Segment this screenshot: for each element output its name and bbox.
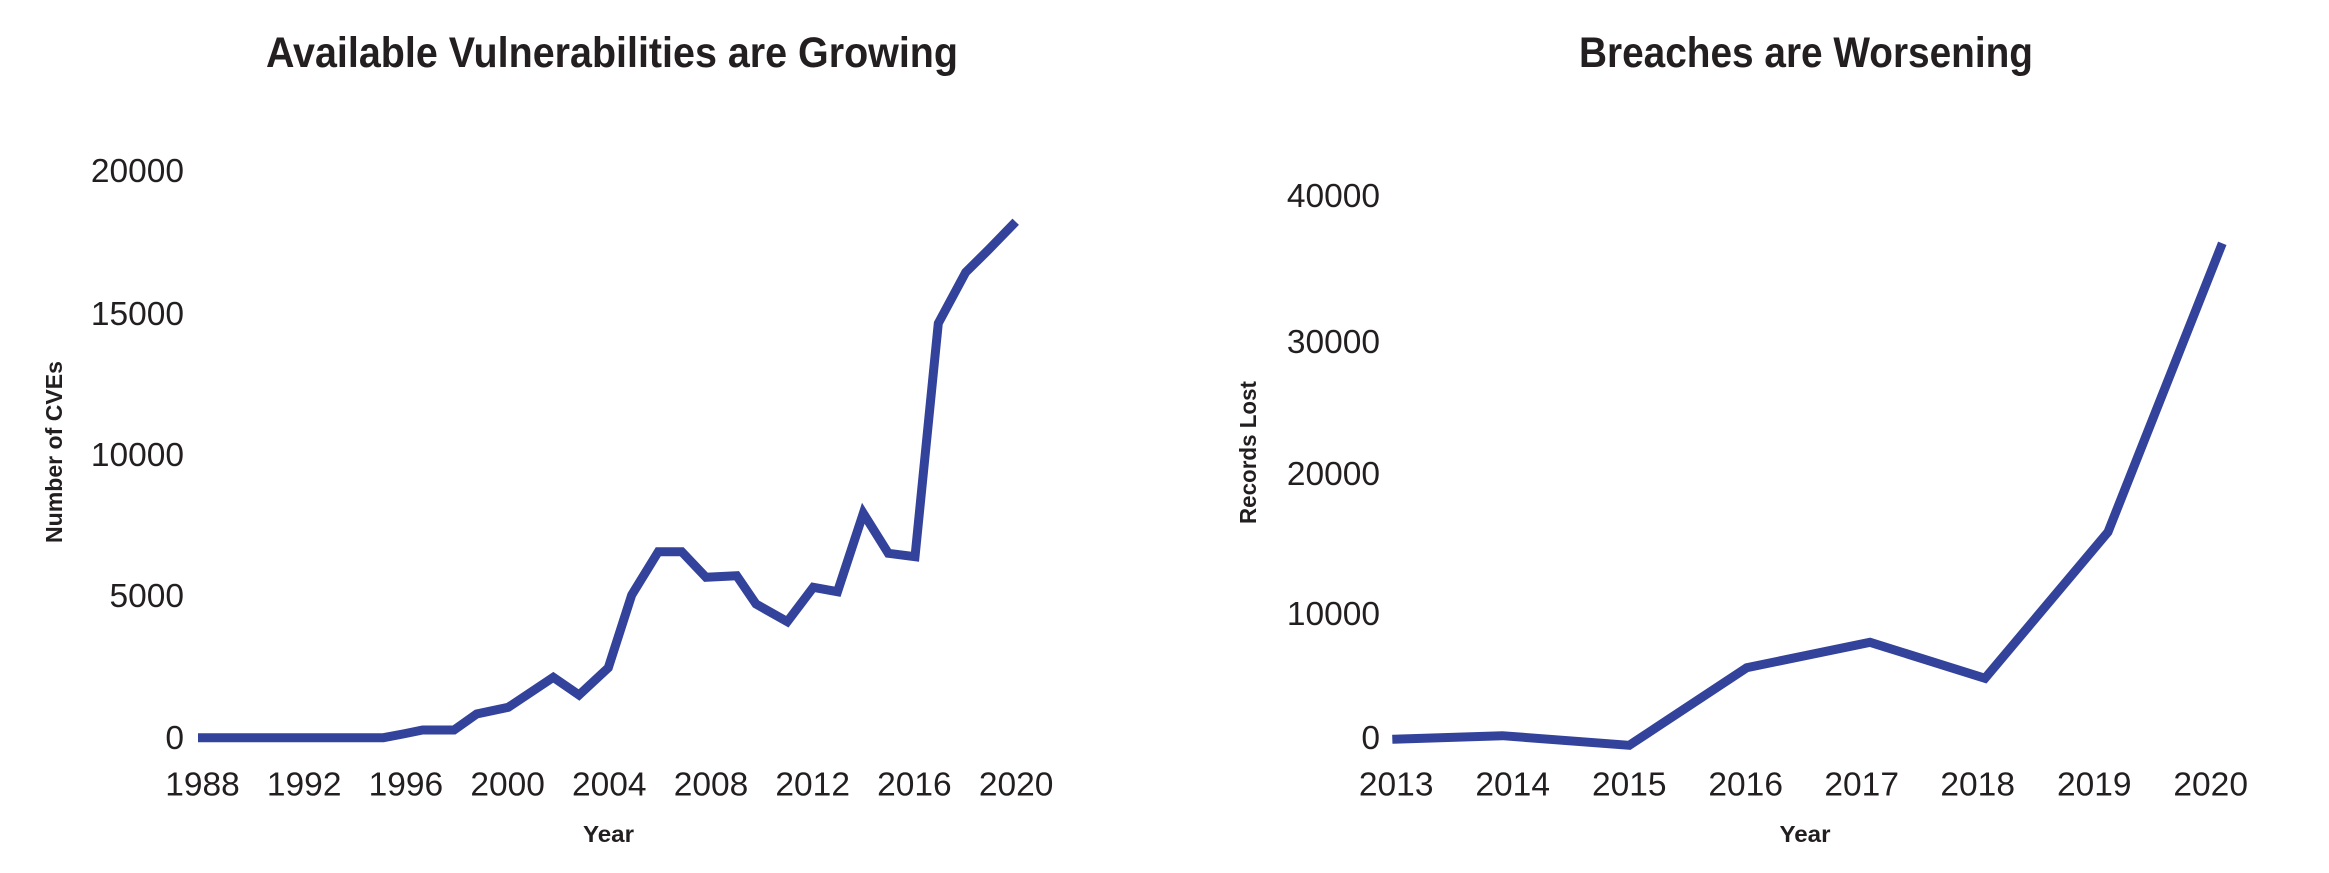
y axis tick labels: 5000: [109, 578, 184, 615]
line series: records lost per year: [1392, 243, 2222, 745]
panel: breaches chart: [1235, 29, 2248, 847]
x axis label: Year: Year: [583, 821, 634, 847]
x axis tick labels: 2012: [775, 766, 850, 804]
y axis tick labels: 10000: [91, 437, 184, 474]
x axis tick labels: 1996: [369, 766, 443, 804]
x axis tick labels: [1359, 766, 2248, 804]
x axis tick labels: 2019: [2057, 766, 2132, 804]
x axis tick labels: 2013: [1359, 766, 1433, 804]
y axis label: Number of CVEs: Number of CVEs: [41, 361, 67, 543]
y axis tick labels: 40000: [1287, 178, 1380, 215]
x axis tick labels: 2018: [1940, 766, 2015, 804]
x axis tick labels: [165, 766, 1053, 804]
x axis tick labels: 2008: [674, 766, 748, 804]
y axis tick labels: [91, 153, 184, 757]
y axis tick labels: 0: [1361, 720, 1380, 757]
x axis tick labels: 2004: [572, 766, 647, 804]
x axis tick labels: 2016: [1708, 766, 1783, 804]
y axis tick labels: 20000: [91, 153, 184, 190]
x axis tick labels: 2020: [2173, 766, 2248, 804]
y axis tick labels: 0: [165, 720, 184, 757]
x axis tick labels: 2000: [470, 766, 545, 804]
x axis tick labels: 2014: [1475, 766, 1550, 804]
x axis tick labels: 2015: [1592, 766, 1667, 804]
panel: available vulnerabilities chart: [41, 29, 1053, 847]
y axis tick labels: 20000: [1287, 456, 1380, 493]
y axis tick labels: 30000: [1287, 324, 1380, 361]
x axis tick labels: 2020: [979, 766, 1053, 804]
y axis label: Records Lost: Records Lost: [1235, 381, 1261, 524]
title: Available Vulnerabilities are Growing: Available Vulnerabilities are Growing: [266, 29, 958, 77]
x axis label: Year: Year: [1780, 821, 1831, 847]
y axis tick labels: 10000: [1287, 596, 1380, 633]
x axis tick labels: 1992: [267, 766, 341, 804]
x axis tick labels: 1988: [165, 766, 240, 804]
title: Breaches are Worsening: Breaches are Worsening: [1579, 29, 2033, 77]
y axis tick labels: 15000: [91, 296, 184, 333]
y axis tick labels: [1287, 178, 1380, 757]
x axis tick labels: 2016: [877, 766, 952, 804]
line series: number of CVEs per year: [198, 222, 1016, 738]
x axis tick labels: 2017: [1824, 766, 1899, 804]
